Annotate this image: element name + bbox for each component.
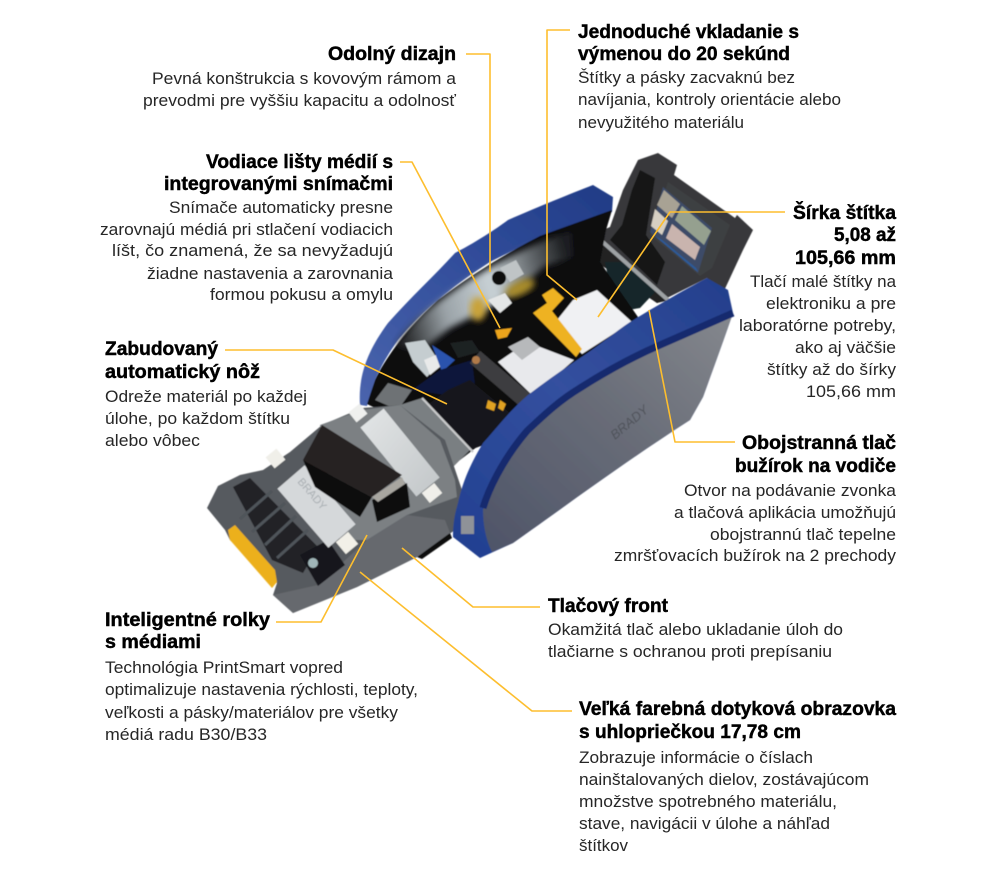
callout: Zabudovaný automatický nôž: úlohe, po každom štítku	[105, 409, 290, 428]
callout: Veľká farebná dotyková obrazovka	[579, 699, 896, 855]
callout: Šírka štítka: elektroniku a pre	[766, 294, 896, 313]
callout: Vodiace lišty: integrovanými snímačmi	[164, 174, 393, 195]
callout: Veľká farebná dotyková obrazovka: Veľká farebná dotyková obrazovka	[579, 699, 896, 720]
callout: Inteligentné rolky: Technológia PrintSmart vopred	[105, 658, 343, 677]
orange guide tab	[495, 328, 512, 339]
callout: Odolný dizajn: Odolný dizajn	[328, 44, 456, 65]
callout: Obojstranná tlač: a tlačová aplikácia umožňujú	[674, 503, 896, 522]
callout: Tlačový front: tlačiarne s ochranou proti prepísaniu	[548, 642, 832, 661]
dark band on the shell	[483, 313, 733, 508]
callout: Jednoduché vkladanie: nevyužitého materiálu	[578, 113, 744, 132]
yellow media guide	[533, 288, 582, 357]
callout: Vodiace lišty: Vodiace lišty médií s	[206, 152, 393, 173]
callout: Veľká farebná dotyková obrazovka: Zobrazuje informácie o číslach	[579, 748, 813, 767]
steel rod	[596, 236, 668, 300]
callout: Inteligentné rolky: veľkosti a pásky/materiálov pre všetky	[105, 703, 399, 722]
callout: Obojstranná tlač: obojstrannú tlač tepelne	[710, 525, 896, 544]
black ribbon cartridge	[303, 425, 410, 522]
printer photo illustration	[207, 153, 753, 613]
callout: Odolný dizajn	[143, 44, 457, 110]
callout: Šírka štítka: 105,66 mm	[806, 382, 896, 401]
ribbon roller rear	[354, 408, 436, 498]
callout: Vodiace lišty: zarovnajú médiá pri stlačení vodiacich	[100, 220, 393, 239]
callout: Šírka štítka: ako aj väčšie	[795, 338, 896, 357]
callout: Zabudovaný automatický nôž	[105, 339, 307, 450]
callout: Šírka štítka: 105,66 mm	[795, 248, 896, 269]
callout: Zabudovaný automatický nôž: Zabudovaný	[105, 339, 218, 360]
callout: Jednoduché vkladanie: výmenou do 20 sekúnd	[578, 44, 790, 65]
callout: Tlačový front	[548, 596, 843, 661]
callout: Vodiace lišty: Snímače automaticky presne	[169, 198, 393, 217]
callout: Obojstranná tlač: Otvor na podávanie zvonka	[684, 481, 897, 500]
callout: Jednoduché vkladanie: Štítky a pásky zacvaknú bez	[578, 68, 795, 87]
callout: Šírka štítka: Šírka štítka	[793, 202, 896, 224]
callout: Obojstranná tlač: zmršťovacích bužírok na 2 prechody	[614, 546, 897, 565]
callout: Tlačový front: Okamžitá tlač alebo ukladanie úloh do	[548, 620, 843, 639]
black hinge grid	[233, 478, 318, 573]
callout: Veľká farebná dotyková obrazovka: s uhlopriečkou 17,78 cm	[579, 722, 801, 743]
callout: Obojstranná tlač: bužírok na vodiče	[735, 456, 896, 477]
touch screen	[650, 187, 712, 273]
callout: Jednoduché vkladanie	[578, 22, 841, 132]
callout: Obojstranná tlač: Obojstranná tlač	[742, 433, 896, 454]
leader lines	[225, 30, 785, 711]
callout: Šírka štítka: 5,08 až	[834, 225, 896, 246]
callout: Obojstranná tlač	[614, 433, 897, 565]
callout: Jednoduché vkladanie: Jednoduché vkladanie s	[578, 22, 799, 43]
ribbon roller front: BRADY	[295, 476, 329, 513]
front blue shell	[453, 278, 733, 558]
white media rolls	[498, 290, 632, 396]
callout: Tlačový front: Tlačový front	[548, 596, 669, 617]
callout: Zabudovaný automatický nôž: alebo vôbec	[105, 431, 201, 450]
callout: Veľká farebná dotyková obrazovka: štítkov	[579, 836, 628, 855]
gold smears on the wall	[470, 297, 486, 321]
callout: Vodiace lišty: líšt, čo znamená, že sa nevyžadujú	[112, 241, 393, 260]
callout: Vodiace lišty: formou pokusu a omylu	[210, 285, 393, 304]
callout: Odolný dizajn: prevodmi pre vyššiu kapacitu a odolnosť	[143, 91, 457, 110]
callout: Veľká farebná dotyková obrazovka: stave, navigácii v úlohe a náhľad	[579, 814, 830, 833]
callout: Odolný dizajn: Pevná konštrukcia s kovovým rámom a	[152, 69, 457, 88]
callout: Vodiace lišty: žiadne nastavenia a zarovnania	[147, 264, 394, 283]
callout: Veľká farebná dotyková obrazovka: nainštalovaných dielov, zostávajúcom	[579, 770, 869, 789]
printer interior	[367, 210, 640, 470]
yellow handle	[228, 525, 277, 588]
rear lid with screen	[582, 153, 753, 312]
callout: Inteligentné rolky	[105, 610, 418, 744]
callout: Jednoduché vkladanie: navíjania, kontroly orientácie alebo	[578, 90, 841, 109]
callout: Šírka štítka: Tlačí malé štítky na	[750, 272, 897, 291]
callout: Inteligentné rolky: s médiami	[105, 632, 201, 653]
front grey face	[483, 313, 733, 552]
callout: Šírka štítka: laboratórne potreby,	[739, 316, 896, 335]
cutter circuit area	[420, 380, 516, 450]
rear blue shell	[360, 185, 613, 406]
callout: Inteligentné rolky: optimalizuje nastavenia rýchlosti, teploty,	[105, 680, 418, 699]
callout: Veľká farebná dotyková obrazovka: množstve spotrebného materiálu,	[579, 792, 837, 811]
callout: Šírka štítka	[739, 202, 897, 401]
brand mark: BRADY	[607, 401, 652, 442]
callout: Šírka štítka: štítky až do šírky	[767, 360, 897, 379]
callout: Zabudovaný automatický nôž: Odreže materiál po každej	[105, 387, 307, 406]
callout: Vodiace lišty	[100, 152, 394, 304]
callout: Zabudovaný automatický nôž: automatický nôž	[105, 362, 260, 383]
feed slot	[461, 516, 474, 534]
callout: Inteligentné rolky: médiá radu B30/B33	[105, 725, 267, 744]
front media tray	[207, 405, 462, 613]
ribbon roller front	[271, 453, 352, 549]
callout: Inteligentné rolky: Inteligentné rolky	[105, 610, 270, 631]
